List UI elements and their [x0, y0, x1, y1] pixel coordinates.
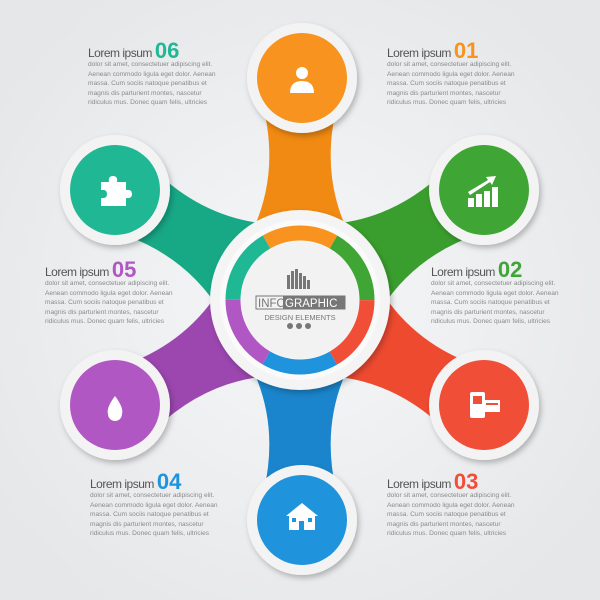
center emblem: INFO [258, 298, 286, 310]
center circle [208, 208, 392, 392]
node 02 [429, 135, 539, 245]
text 02: Lorem ipsum02 [431, 257, 522, 282]
text 06: dolor sit amet, consectetuer adipiscing elit. Aenean commodo ligula eget dolor. Aenean massa. Cum sociis natoque penatibus et magnis dis parturient montes, nascetur ridiculus mus. Donec quam felis, ultricies [88, 61, 216, 106]
text 04: dolor sit amet, consectetuer adipiscing elit. Aenean commodo ligula eget dolor. Aenean massa. Cum sociis natoque penatibus et magnis dis parturient montes, nascetur ridiculus mus. Donec quam felis, ultricies [90, 492, 218, 537]
text 04 [90, 469, 218, 537]
center emblem: GRAPHIC [285, 298, 337, 310]
text 06: Lorem ipsum06 [88, 38, 179, 63]
arm: blue [248, 360, 352, 490]
text 05: dolor sit amet, consectetuer adipiscing elit. Aenean commodo ligula eget dolor. Aenean massa. Cum sociis natoque penatibus et magnis dis parturient montes, nascetur ridiculus mus. Donec quam felis, ultricies [45, 280, 173, 325]
text 02: dolor sit amet, consectetuer adipiscing elit. Aenean commodo ligula eget dolor. Aenean massa. Cum sociis natoque penatibus et magnis dis parturient montes, nascetur ridiculus mus. Donec quam felis, ultricies [431, 280, 559, 325]
text 03 [387, 469, 515, 537]
text 03: Lorem ipsum03 [387, 469, 478, 494]
text 06 [88, 38, 216, 106]
arm: green [325, 158, 490, 314]
arm: orange [248, 110, 352, 240]
text 05 [45, 257, 173, 325]
center emblem [256, 269, 345, 329]
center emblem: DESIGN ELEMENTS [264, 313, 336, 322]
text 04: Lorem ipsum04 [90, 469, 181, 494]
node 05 [60, 350, 170, 460]
text 03: dolor sit amet, consectetuer adipiscing elit. Aenean commodo ligula eget dolor. Aenean massa. Cum sociis natoque penatibus et magnis dis parturient montes, nascetur ridiculus mus. Donec quam felis, ultricies [387, 492, 515, 537]
node 01 [247, 23, 357, 133]
arm: teal [110, 158, 275, 314]
node 06 [60, 135, 170, 245]
node 03 [429, 350, 539, 460]
text 02 [431, 257, 559, 325]
text 05: Lorem ipsum05 [45, 257, 136, 282]
arm: purple [110, 286, 275, 442]
text 01 [387, 38, 515, 106]
text 01: Lorem ipsum01 [387, 38, 478, 63]
arm: red [325, 286, 490, 442]
text 01: dolor sit amet, consectetuer adipiscing elit. Aenean commodo ligula eget dolor. Aenean massa. Cum sociis natoque penatibus et magnis dis parturient montes, nascetur ridiculus mus. Donec quam felis, ultricies [387, 61, 515, 106]
node 04 [247, 465, 357, 575]
